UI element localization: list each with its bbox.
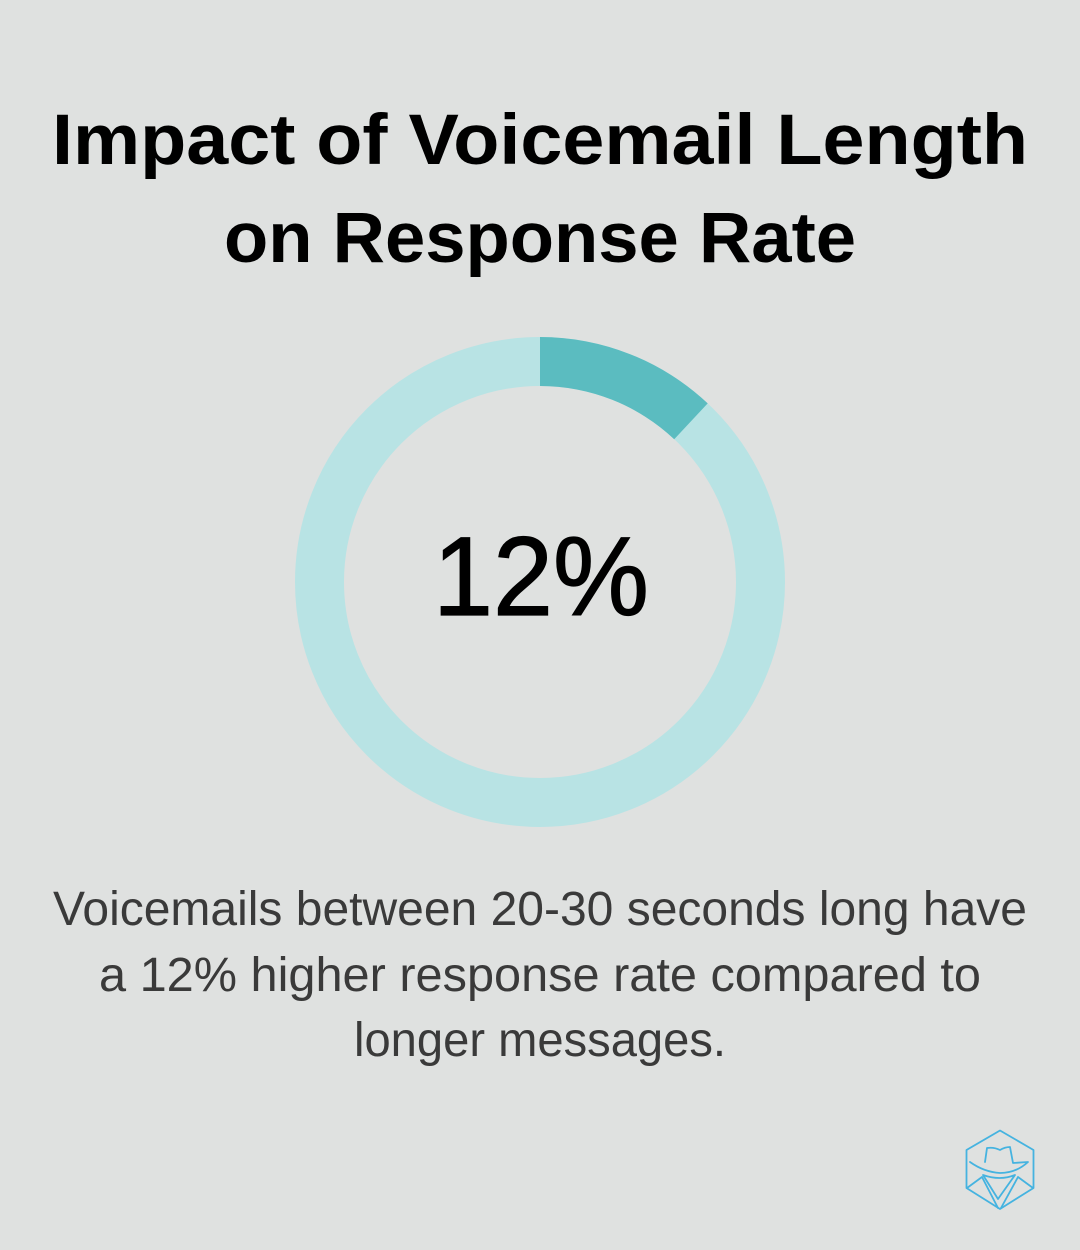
description text: Voicemails between 20-30 seconds long have [53, 883, 1027, 936]
description text: longer messages. [354, 1014, 726, 1067]
title [52, 101, 1028, 278]
donut chart: 12%: 12% [433, 514, 649, 639]
description text [53, 883, 1027, 1067]
title: Impact of Voicemail Length [52, 101, 1028, 180]
title: on Response Rate [224, 199, 856, 278]
icon: logo hexagon with hat [966, 1130, 1034, 1209]
description text: a 12% higher response rate compared to [99, 949, 981, 1002]
donut chart: 12% [320, 337, 760, 802]
